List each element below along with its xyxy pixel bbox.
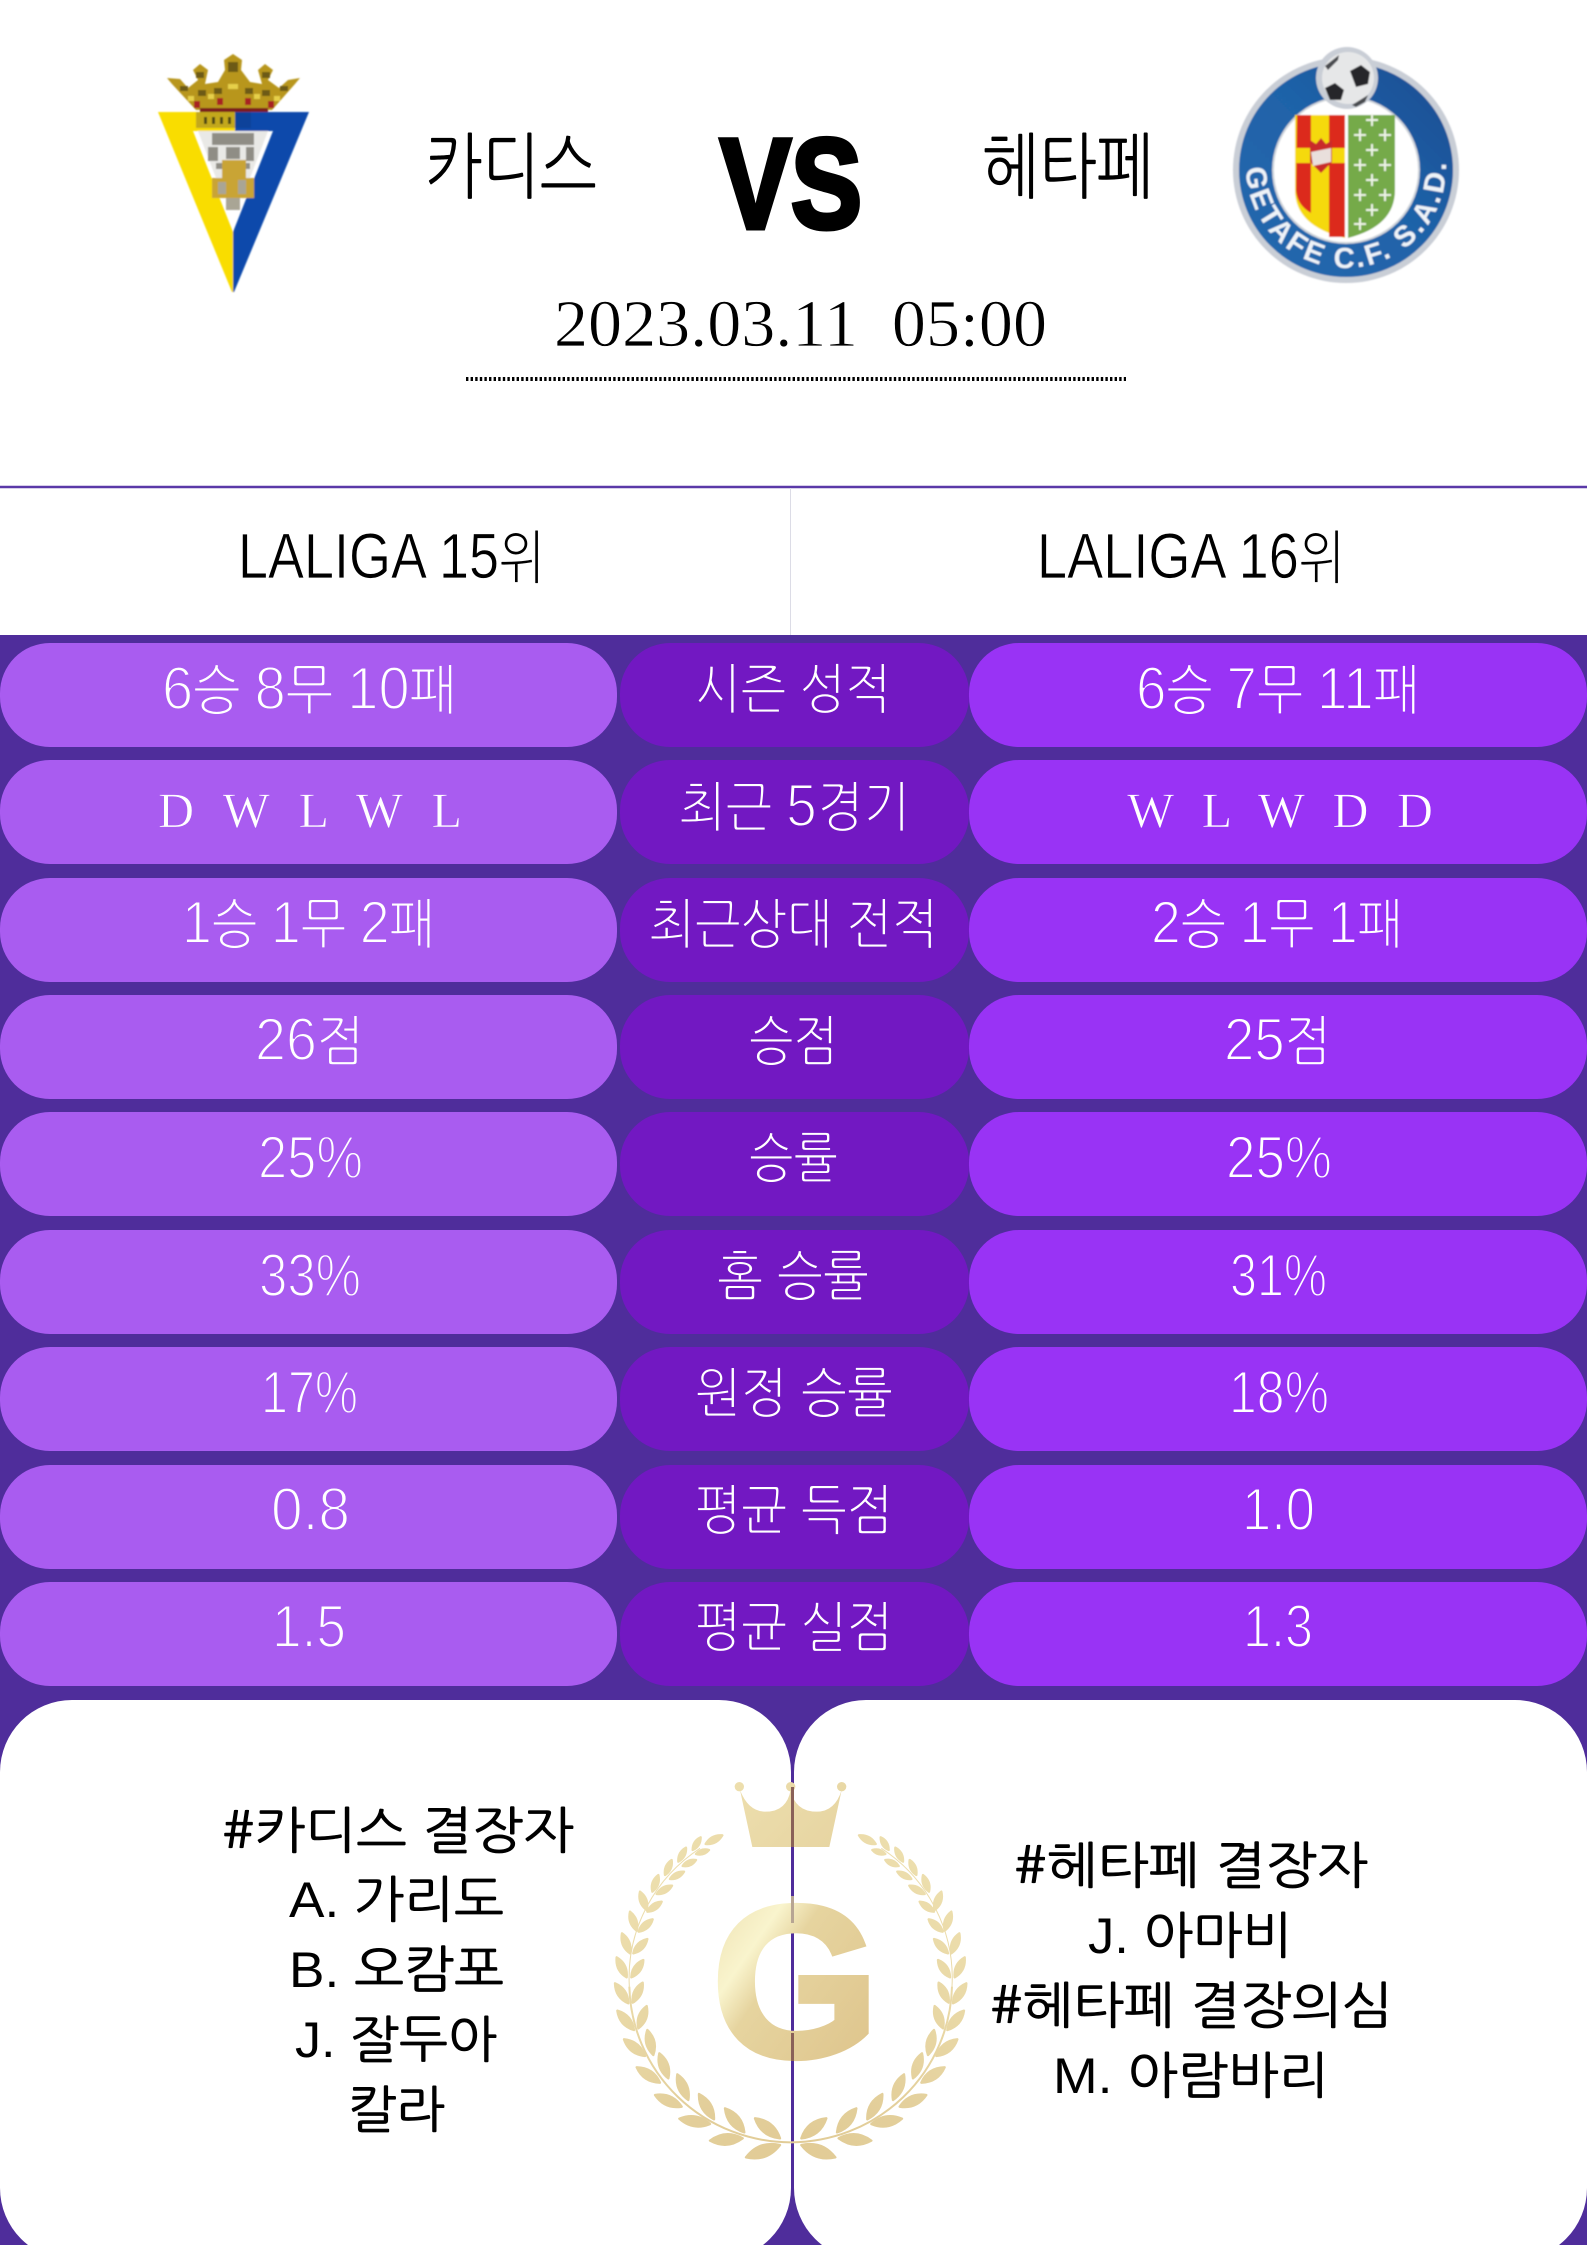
icon: Cadiz crest	[158, 54, 309, 292]
panel: away absences: #헤타페 결장자	[1014, 1841, 1368, 1891]
row: points	[0, 995, 1587, 1099]
logo: gold wreath and crown	[615, 1782, 966, 2158]
ball	[1316, 47, 1378, 109]
row: average conceded: 1.3	[1243, 1593, 1313, 1660]
home league rank: LALIGA 15위	[238, 520, 545, 592]
row: away win rate: 17%	[261, 1359, 358, 1426]
row: season record: 시즌 성적	[695, 662, 891, 716]
row: away win rate	[0, 1347, 1587, 1451]
row: home win rate: 31%	[1230, 1242, 1327, 1309]
row: season record: 6승 8무 10패	[162, 655, 457, 722]
row: head to head: 최근상대 전적	[649, 897, 938, 951]
row: season record: 6승 7무 11패	[1136, 655, 1420, 722]
row: away win rate: 원정 승률	[695, 1366, 893, 1420]
icon: Getafe crest	[1232, 46, 1460, 284]
panel: home absences: J. 잘두아	[295, 2012, 497, 2068]
dotted divider	[466, 377, 1126, 381]
title: VS: VS	[720, 113, 862, 256]
panel: home absences: #카디스 결장자	[222, 1806, 574, 1856]
shield tower	[196, 112, 268, 210]
row: home win rate	[0, 1230, 1587, 1334]
panel: stats background	[0, 635, 1587, 2245]
panel: home absences	[0, 1700, 791, 2245]
panel: away absences: #헤타페 결장의심	[990, 1981, 1393, 2031]
row: win rate: 승률	[749, 1131, 838, 1185]
panel: away absences	[794, 1700, 1587, 2245]
panel: home absences: A. 가리도	[289, 1872, 504, 1928]
row: away win rate: 18%	[1229, 1359, 1329, 1426]
row: points: 25점	[1224, 1006, 1331, 1073]
crown	[735, 1782, 846, 1847]
icon: Getafe crest: GETAFE C.F. S.A.D.	[1245, 163, 1448, 270]
row: head to head: 1승 1무 2패	[182, 889, 435, 956]
row: head to head	[0, 878, 1587, 982]
row: recent five	[0, 760, 1587, 864]
row: win rate: 25%	[1226, 1124, 1332, 1191]
row: points: 승점	[749, 1014, 838, 1068]
row: average goals	[0, 1465, 1587, 1569]
row: season record	[0, 643, 1587, 747]
row: recent five: D W L W L	[158, 782, 462, 838]
row: home win rate: 33%	[259, 1242, 361, 1309]
panel: away absences: M. 아람바리	[1053, 2048, 1329, 2104]
title: team away: 헤타페	[982, 131, 1154, 203]
letter G: G	[712, 1861, 879, 2102]
row: recent five: 최근 5경기	[679, 772, 910, 839]
shield	[1295, 114, 1395, 238]
row: win rate: 25%	[258, 1124, 363, 1191]
panel: away absences: J. 아마비	[1088, 1908, 1292, 1964]
wreath right	[791, 1835, 966, 2158]
row: average conceded: 1.5	[272, 1593, 346, 1660]
title: team home: 카디스	[425, 131, 597, 203]
row: average goals: 0.8	[271, 1476, 350, 1543]
panel: home absences: B. 오캄포	[289, 1942, 504, 1998]
row: win rate	[0, 1112, 1587, 1216]
row: average conceded	[0, 1582, 1587, 1686]
crown	[167, 54, 300, 112]
row: average goals: 평균 득점	[695, 1483, 893, 1537]
row: home win rate: 홈 승률	[717, 1249, 869, 1303]
shield blue arm	[233, 112, 309, 292]
row: head to head: 2승 1무 1패	[1151, 889, 1403, 956]
row: recent five: W L W D D	[1127, 782, 1433, 838]
panel: home absences: 칼라	[348, 2085, 445, 2135]
wreath left	[615, 1835, 791, 2158]
row: average conceded: 평균 실점	[695, 1600, 893, 1654]
row: points: 26점	[255, 1006, 364, 1073]
row: average goals: 1.0	[1242, 1476, 1315, 1543]
shield yellow arm	[158, 112, 235, 292]
match date: 2023.03.11 05:00	[554, 287, 1047, 361]
away league rank: LALIGA 16위	[1037, 520, 1345, 592]
